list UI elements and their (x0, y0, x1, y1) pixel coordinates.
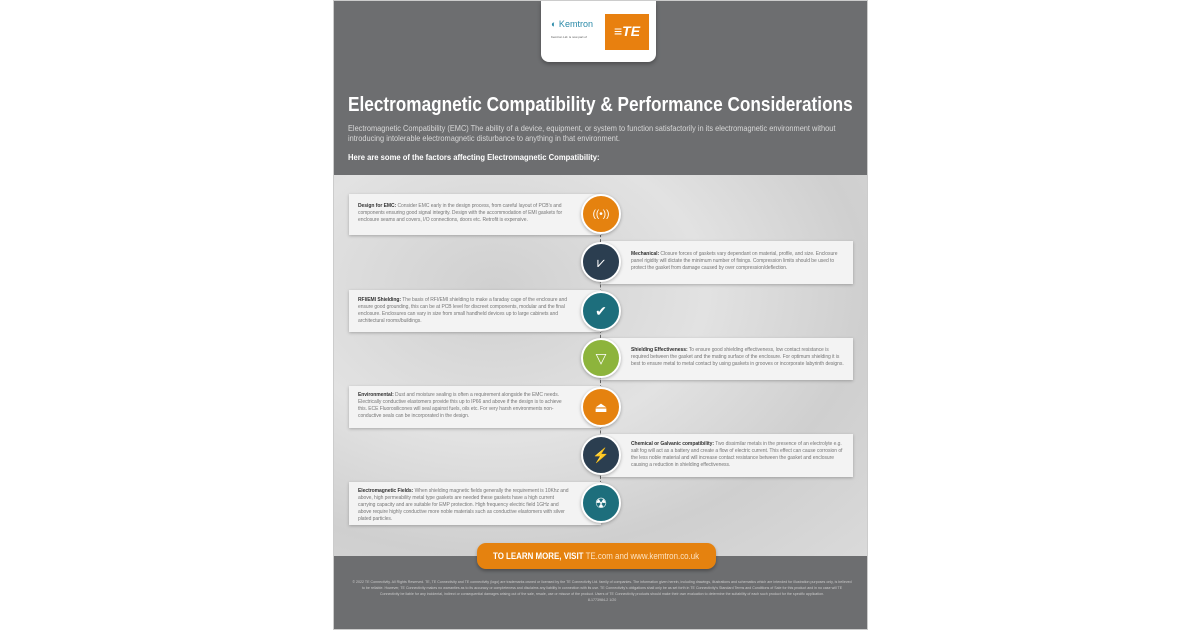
document (333, 0, 868, 630)
card: Environmental: Environmental: Dust and moisture sealing is often a requirement alongside the EMC needs. Electrically conductive elastomers provide this up to IP66 and above if the design is to achieve this. ECE Fluorosilicones will seal against fuels, oils etc. For very harsh environments non-conductive seals can be incorporated in the design. (358, 392, 562, 419)
card: RFI/EMI Shielding: RFI/EMI Shielding: The basis of RFI/EMI shielding to make a faraday cage of the enclosure and ensure good grounding, this can be at PCB level for discreet components, modular and the final enclosure. Enclosures can vary in size from small handheld devices up to large cabinets and architectural rooms/buildings. (358, 297, 567, 324)
footer text: 8-1773984-2 1/20 (588, 598, 616, 602)
subheading: Here are some of the factors affecting Electromagnetic Compatibility: (348, 152, 600, 162)
intro text: Electromagnetic Compatibility (EMC) The ability of a device, equipment, or system to function satisfactorily in its electromagnetic environment without (348, 123, 835, 133)
footer text: © 2022 TE Connectivity. All Rights Reserved. TE, TE Connectivity and TE connectivity (logo) are trademarks owned or licensed by the TE Connectivity Ltd. family of companies. The information given herein, including drawings, illustrations and schematics which are intended for illustration purposes only, is believed to be reliable. However, TE Connectivity makes no warranties as to its accuracy or completeness and disclaims any liability in connection with its use. TE Connectivity's obligations shall only be as set forth in TE Connectivity's Standard Terms and Conditions of Sale for this product and in no case will TE Connectivity be liable for any incidental, indirect or consequential damages arising out of the sale, resale, use or misuse of the product. Users of TE Connectivity products should make their own evaluation to determine the suitability of each such product for the specific application. (352, 580, 852, 596)
icon: mechanical: ⩗ (597, 254, 605, 270)
card: Environmental (349, 386, 601, 428)
card: Design for EMC (349, 194, 601, 235)
icon: drop (581, 387, 621, 427)
timeline line (600, 214, 601, 504)
intro text (348, 123, 836, 142)
card: Design for EMC: Design for EMC: Consider EMC early in the design process, from careful layout of PCB's and components ensuring good signal integrity. Design with the accommodation of EMI gaskets for enclosure seams and covers, I/O connections, doors etc. Retrofit is expensive. (358, 203, 562, 223)
card: Shielding Effectiveness: Shielding Effectiveness: To ensure good shielding effectiveness, low contact resistance is required between the gasket and the mating surface of the enclosure. For optimum shielding it is best to ensure metal to metal contact by using gaskets in grooves or incorporate labyrinth designs. (631, 347, 844, 367)
icon: radiation: ☢ (595, 494, 607, 510)
card: Shielding Effectiveness (601, 338, 853, 380)
card: Electromagnetic Fields (349, 482, 601, 525)
logo: Kemtron: ◐ Kemtron (551, 19, 593, 29)
icon: battery (581, 435, 621, 475)
logo: Kemtron: Kemtron Ltd. is now part of (551, 35, 587, 39)
intro text: introducing intolerable electromagnetic disturbance to anything in that environment. (348, 132, 620, 142)
CTA button (477, 543, 716, 569)
logo: Kemtron (551, 19, 593, 39)
logo: TE (605, 14, 649, 50)
title: Electromagnetic Compatibility & Performance Considerations (348, 94, 853, 116)
CTA button: TO LEARN MORE, VISIT TE.com and www.kemtron.co.uk (493, 551, 699, 561)
card: Electromagnetic Fields: Electromagnetic Fields: When shielding magnetic fields generally the requirement is 10Khz and above, high permeability metal type gaskets are needed these gaskets have a high current carrying capacity and are suitable for EMP protection. High frequency electric field 1GHz and above require highly conductive more noble materials such as conductive elastomers with silver plated particles. (358, 488, 568, 522)
card: Mechanical: Mechanical: Closure forces of gaskets vary dependant on material, profile, and size. Enclosure panel rigidity will dictate the minimum number of fixings. Compression limits should be used to protect the gasket from damage caused by over compression/deflection. (631, 251, 838, 271)
icon: shield: ✔ (595, 302, 607, 318)
card: RFI/EMI Shielding (349, 290, 601, 332)
icon: mechanical (581, 242, 621, 282)
icon: radiation (581, 483, 621, 523)
icon: drop: ⏏ (594, 398, 608, 414)
icon: battery: ⚡ (592, 446, 610, 462)
logo: TE: ≡TE (614, 23, 640, 39)
icon: signal (581, 194, 621, 234)
icon: shielding (581, 338, 621, 378)
card: Mechanical (601, 241, 853, 284)
card: Chemical: Chemical or Galvanic compatibility: Two dissimilar metals in the presence of an electrolyte e.g. salt fog will act as a battery and create a flow of electric current. This effect can cause corrosion of the less noble material and will increase contact resistance between the gasket and enclosure causing a reduction in shielding effectiveness. (631, 441, 842, 468)
icon: shield (581, 291, 621, 331)
card: Chemical (601, 434, 853, 477)
logo box (541, 1, 656, 62)
icon: signal: ((•)) (593, 208, 609, 220)
icon: shielding: ▽ (596, 350, 606, 366)
